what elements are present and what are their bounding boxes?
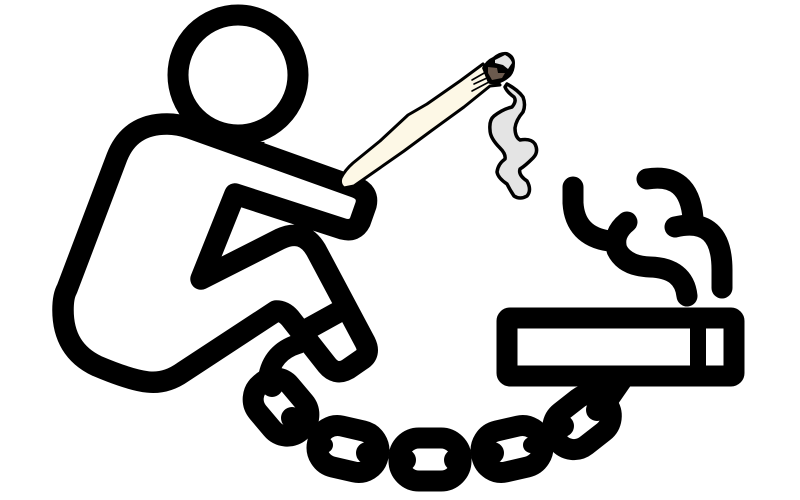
person head <box>178 15 298 135</box>
chain link 3 <box>399 438 461 481</box>
chain link 4 <box>477 422 547 476</box>
icon: cigarette <box>507 318 734 376</box>
chain link 5 <box>545 386 619 458</box>
icon: joint <box>340 52 537 198</box>
person body outline <box>63 124 367 382</box>
cigarette body <box>507 318 734 376</box>
smoke plume upper <box>647 178 693 218</box>
chain connector to cigarette <box>600 378 636 404</box>
smoke plume middle <box>616 222 687 296</box>
icon: chain <box>245 344 636 481</box>
smoke plume right <box>675 225 722 288</box>
cigarette filter divider <box>690 320 706 374</box>
chain link 2 <box>313 422 383 476</box>
shoulder wedge <box>225 140 265 152</box>
chain interlock joints <box>261 375 608 471</box>
icon: rising cigarette smoke <box>573 178 722 296</box>
joint ember <box>488 67 505 80</box>
joint paper frays <box>472 72 489 91</box>
chain link 1 <box>245 370 317 444</box>
joint ash <box>495 55 512 69</box>
icon: seated person <box>63 15 367 382</box>
joint paper <box>340 64 500 188</box>
chain connector to foot <box>268 344 298 378</box>
smoke plume left <box>573 187 609 241</box>
joint smoke <box>490 84 537 198</box>
joint burnt tip <box>482 52 515 84</box>
